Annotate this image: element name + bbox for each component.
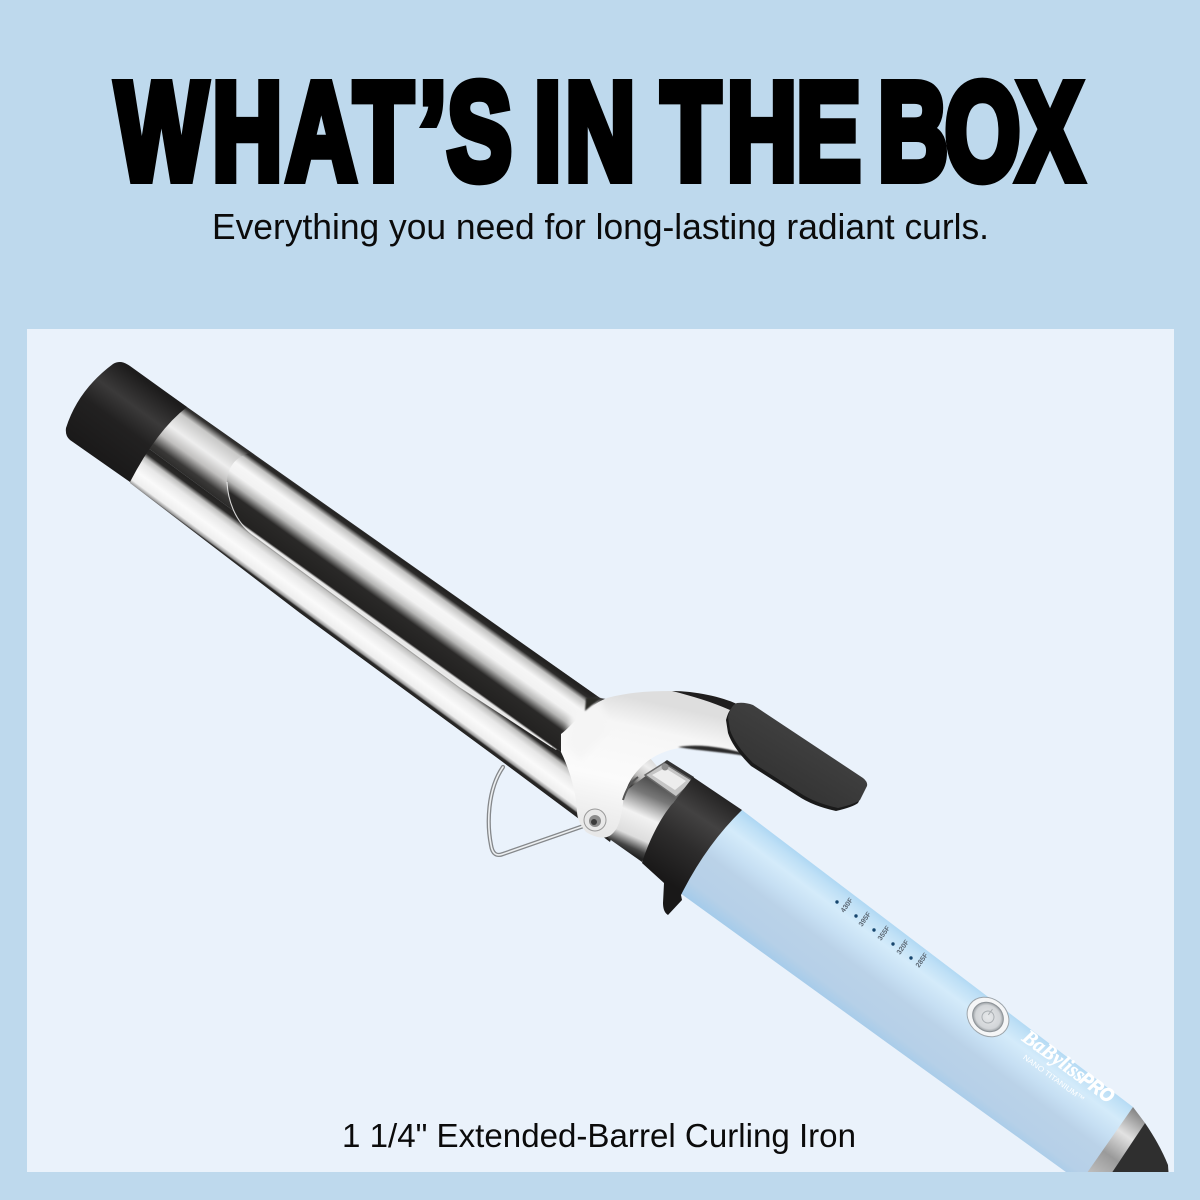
pivot screw bbox=[584, 809, 606, 831]
wire stand bbox=[489, 767, 598, 855]
barrel upper bbox=[125, 395, 660, 799]
subtitle: Everything you need for long-lasting radiant curls. bbox=[212, 206, 989, 247]
clamp head and lever bbox=[561, 691, 750, 838]
hinge bracket bbox=[645, 763, 693, 797]
brand logo: PRO bbox=[1076, 1069, 1118, 1108]
temperature indicators: 355F bbox=[877, 924, 892, 942]
brand logo: BaByliss bbox=[1017, 1024, 1090, 1086]
thumb lever pad bbox=[726, 703, 867, 811]
blue handle bbox=[680, 810, 1133, 1180]
title: WHAT’S IN THE BOX bbox=[116, 55, 1082, 209]
temperature indicators: 285F bbox=[915, 951, 930, 969]
power button bbox=[966, 996, 1010, 1038]
black collar bbox=[642, 777, 742, 915]
temperature indicators: 320F bbox=[896, 938, 911, 956]
curling iron illustration bbox=[66, 362, 1169, 1180]
barrel lower strip bbox=[125, 431, 625, 842]
temperature indicators bbox=[835, 896, 930, 969]
brand logo: NANO TITANIUM™ bbox=[1021, 1053, 1086, 1103]
soft junction highlight bbox=[563, 696, 604, 732]
spring clamp bbox=[227, 453, 612, 750]
black end cap bbox=[1112, 1123, 1168, 1172]
dark reflections on lever bbox=[672, 691, 737, 710]
brand logo bbox=[1020, 1030, 1114, 1102]
panel: product background bbox=[27, 329, 1174, 1172]
temperature indicators: 430F bbox=[840, 896, 855, 914]
caption: 1 1/4" Extended-Barrel Curling Iron bbox=[342, 1117, 856, 1154]
barrel black tip bbox=[66, 362, 187, 482]
silver end ring bbox=[1088, 1107, 1145, 1172]
silver neck bbox=[608, 760, 694, 862]
temperature indicators: 395F bbox=[858, 910, 873, 928]
clamp edge highlight bbox=[227, 482, 552, 747]
